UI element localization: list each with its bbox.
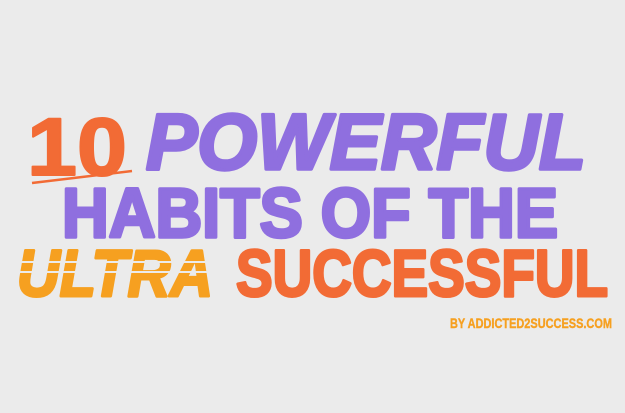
heading: ULTRA: ULTRA [17,236,213,310]
heading: POWERFUL: POWERFUL [146,97,586,186]
heading: HABITS OF THE: HABITS OF THE [62,174,558,252]
title [10,97,608,310]
number 10: 10 [27,102,127,193]
